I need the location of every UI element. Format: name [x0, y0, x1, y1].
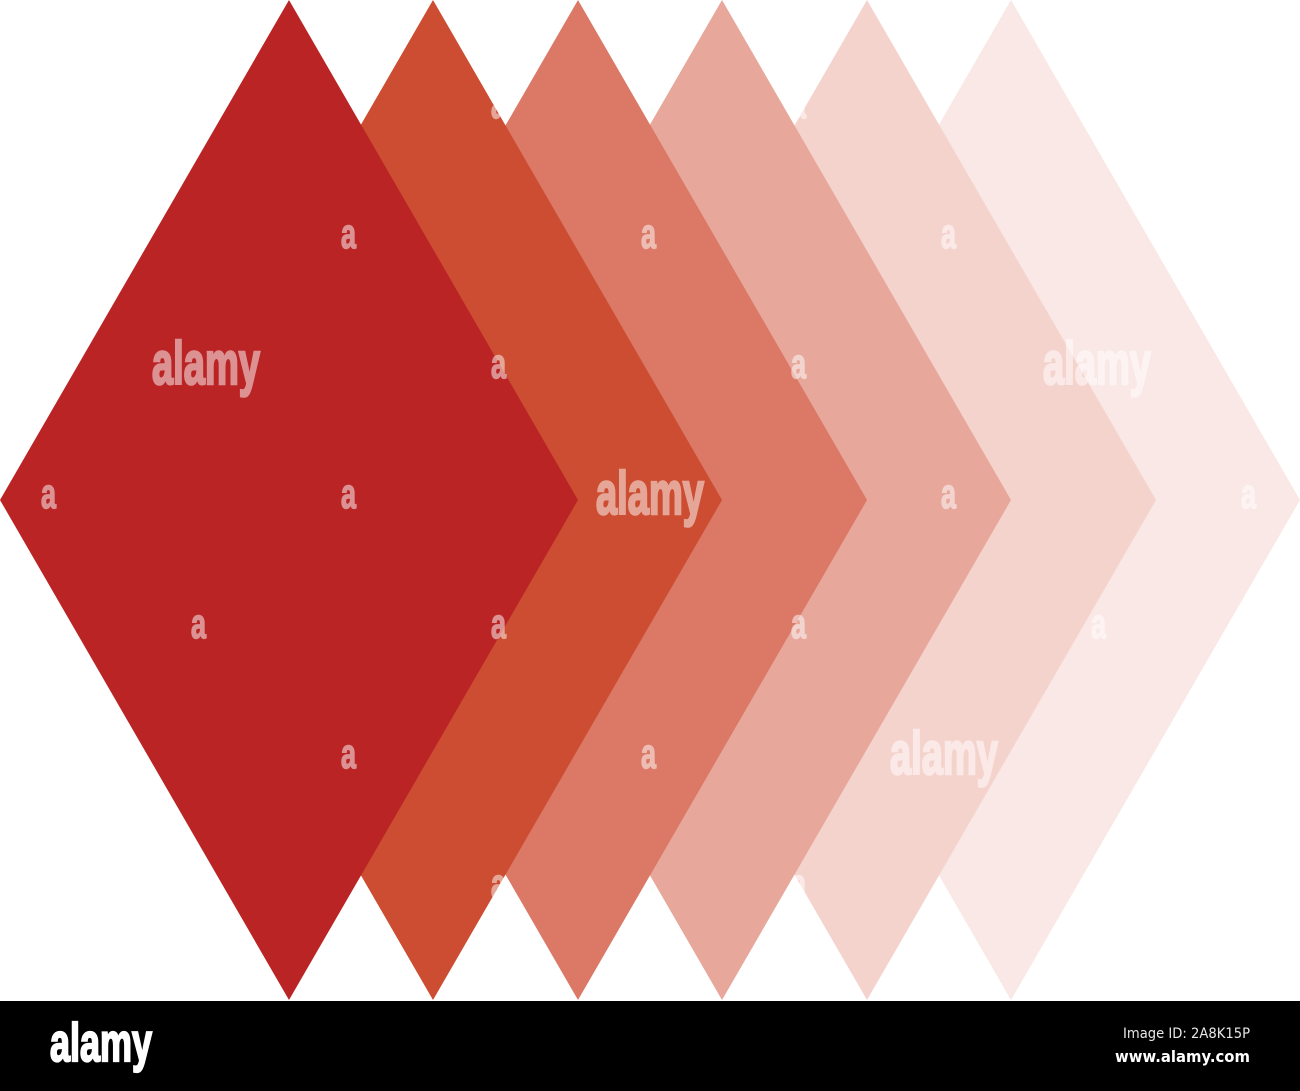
small repeated watermark letters: a	[791, 340, 806, 387]
diamond 4	[433, 0, 1011, 1000]
small repeated watermark letters: a	[191, 600, 206, 647]
small repeated watermark letters: a	[341, 470, 356, 517]
diamond 6: palest	[722, 0, 1300, 1000]
small repeated watermark letters: a	[341, 210, 356, 257]
small repeated watermark letters: a	[491, 600, 506, 647]
small repeated watermark letters	[41, 80, 1256, 907]
small repeated watermark letters: a	[791, 600, 806, 647]
small repeated watermark letters: a	[341, 730, 356, 777]
small repeated watermark letters: a	[791, 860, 806, 907]
footer band	[0, 1001, 1300, 1091]
footer background	[0, 1001, 1300, 1091]
watermark: right: alamy	[1043, 330, 1151, 397]
footer logo: alamy	[50, 1013, 152, 1073]
diamond 1: darkest	[0, 0, 578, 1000]
small repeated watermark letters: a	[1091, 600, 1106, 647]
image id: Image ID: 2A8K15P	[1123, 1026, 1250, 1042]
small repeated watermark letters: a	[41, 470, 56, 517]
watermark: lower: alamy	[890, 720, 998, 787]
small repeated watermark letters: a	[641, 730, 656, 777]
small repeated watermark letters: a	[491, 860, 506, 907]
watermark: centre: alamy	[596, 460, 704, 527]
diamond 3	[289, 0, 867, 1000]
large watermarks	[152, 330, 1151, 787]
diamond 2	[144, 0, 722, 1000]
watermark: left: alamy	[152, 330, 260, 397]
small repeated watermark letters: a	[1241, 470, 1256, 517]
small repeated watermark letters: a	[941, 470, 956, 517]
website: www.alamy.com	[1115, 1047, 1250, 1066]
small repeated watermark letters: a	[791, 80, 806, 127]
small repeated watermark letters: a	[491, 80, 506, 127]
diamond 5	[578, 0, 1156, 1000]
small repeated watermark letters: a	[941, 210, 956, 257]
small repeated watermark letters: a	[491, 340, 506, 387]
small repeated watermark letters: a	[641, 210, 656, 257]
